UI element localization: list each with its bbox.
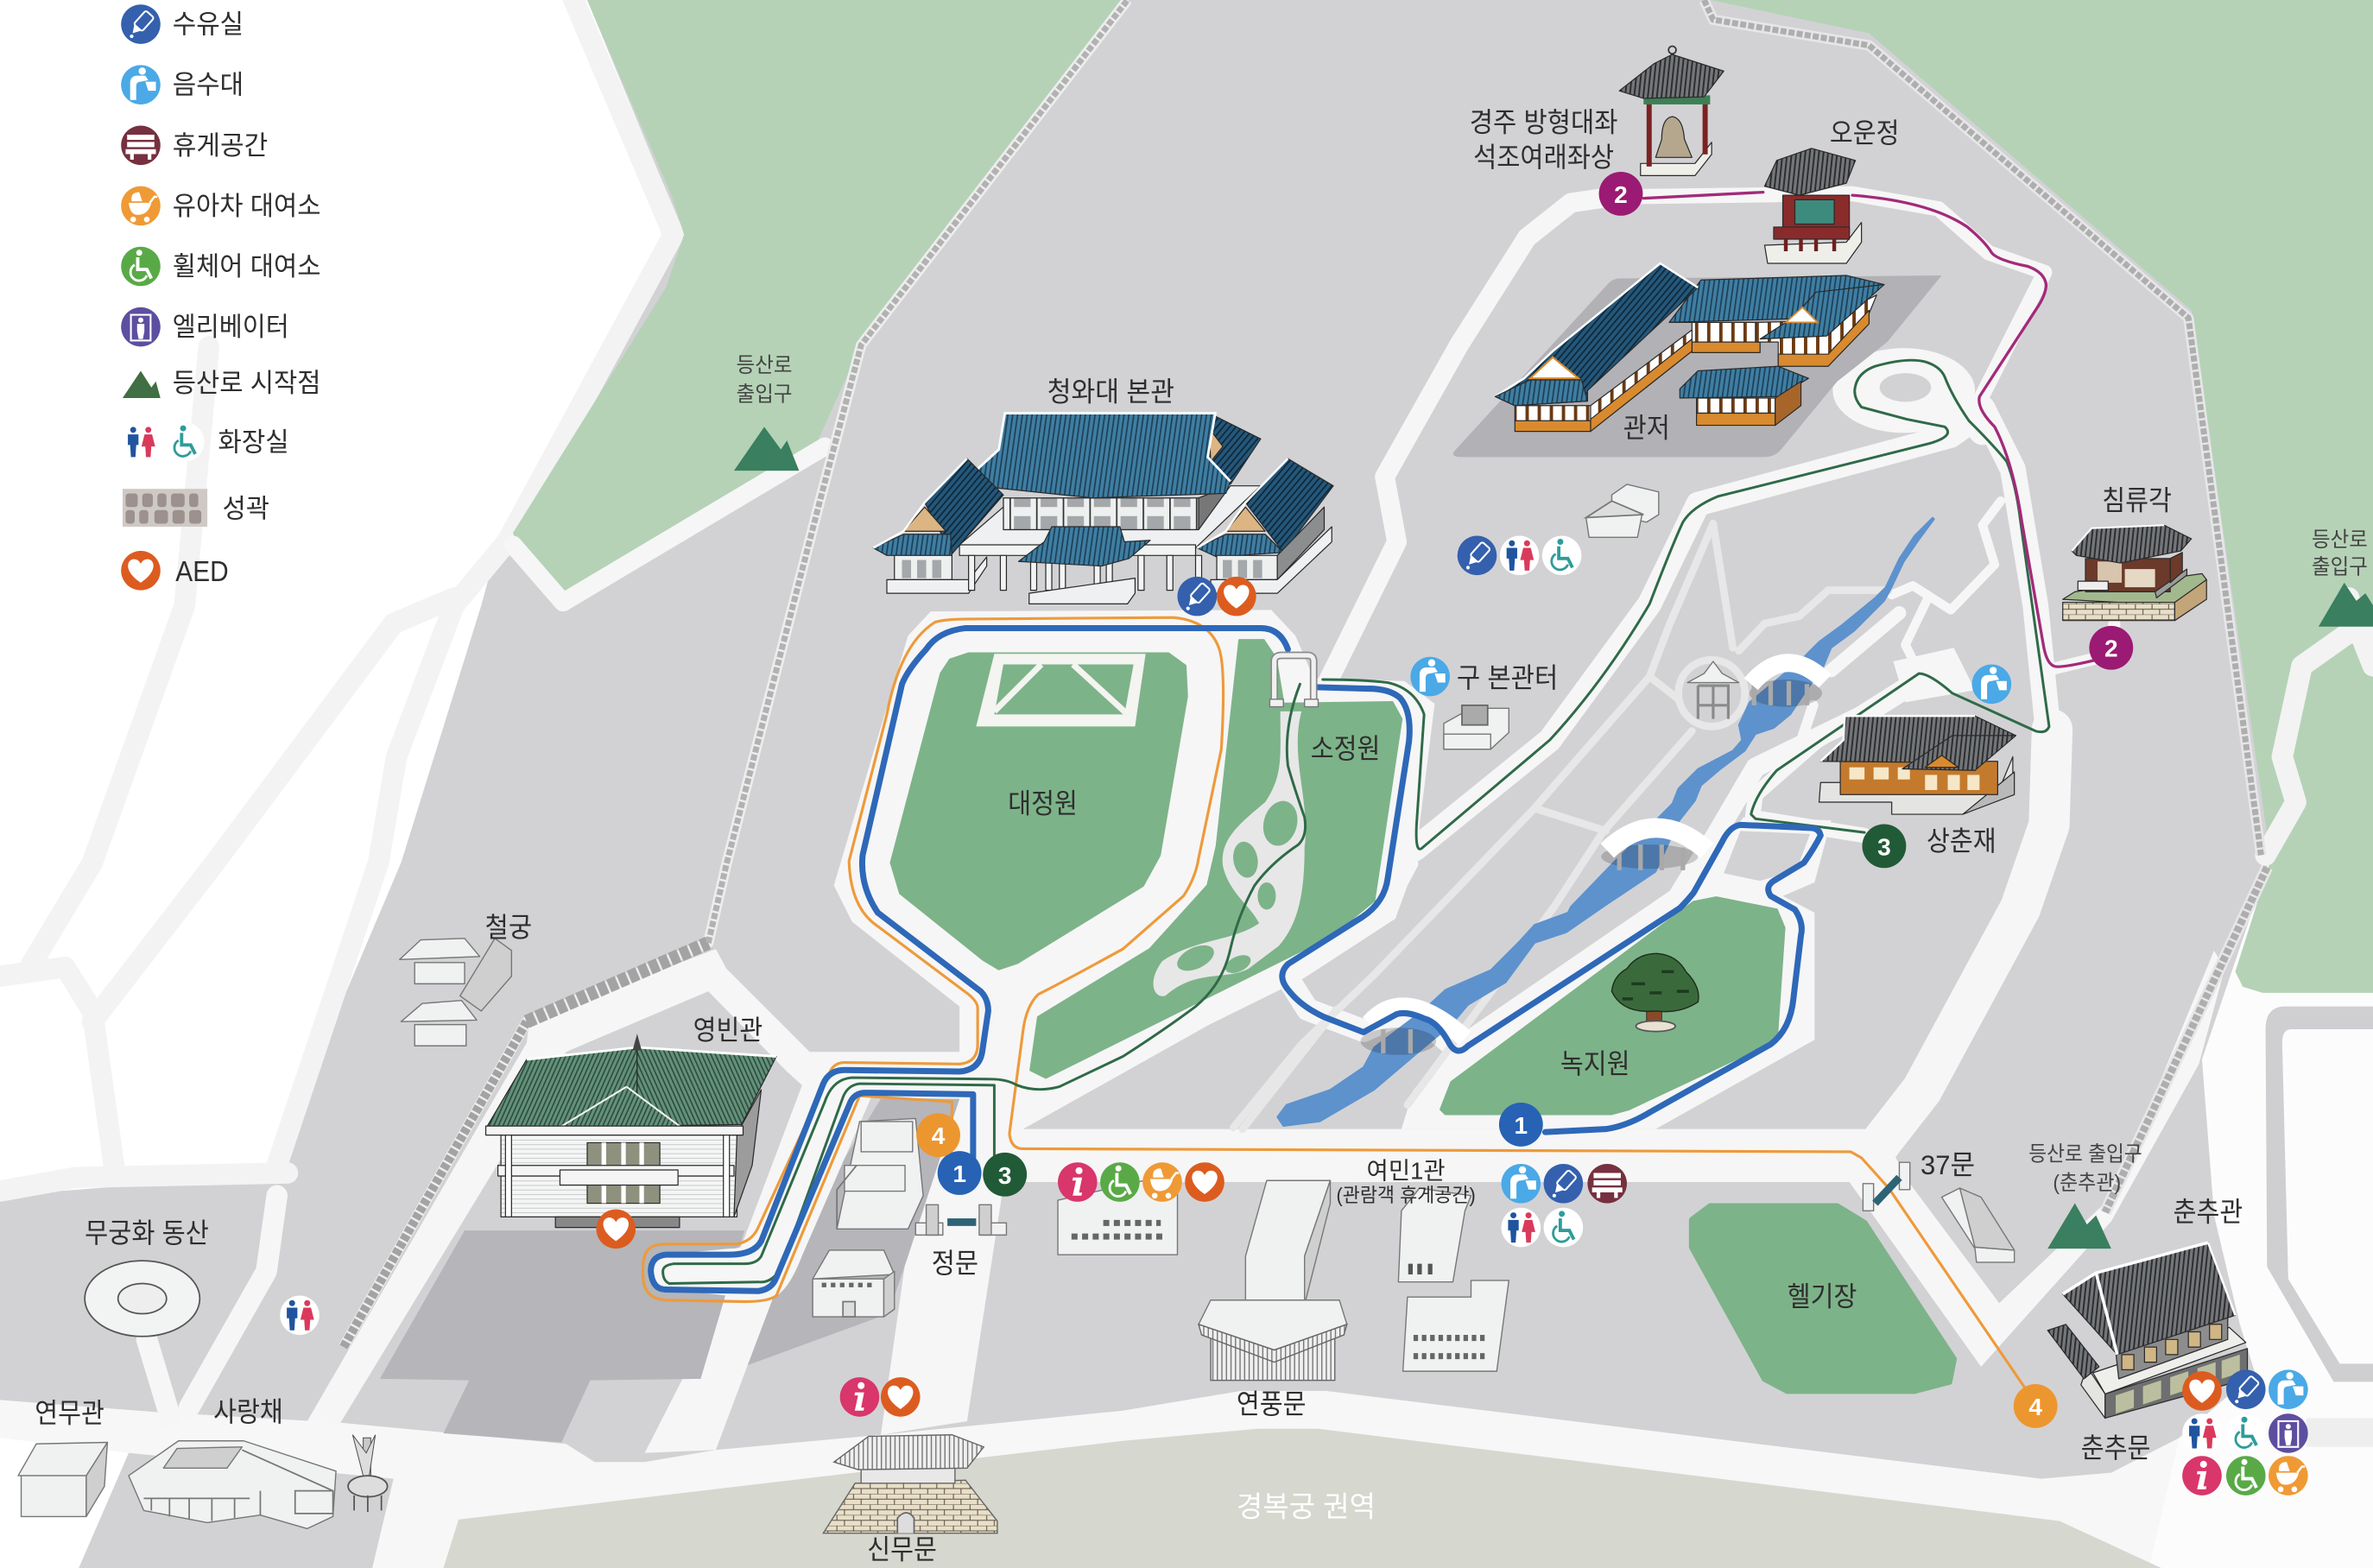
gazebo in garden — [1687, 661, 1739, 719]
map labels: 헬기장 — [1788, 1281, 1857, 1312]
building: tall block behind 연풍문 — [1245, 1180, 1330, 1305]
map labels: 정문 — [932, 1248, 978, 1279]
green: hillside north-west — [513, 0, 1128, 595]
green: 헬기장 lawn — [1692, 1206, 1954, 1391]
legend: 화장실 — [121, 422, 289, 462]
map labels: 경복궁 권역 — [1237, 1491, 1376, 1523]
building: 침류각 — [2063, 525, 2206, 621]
building: beside 37문 — [1942, 1188, 2015, 1262]
statue — [348, 1435, 388, 1512]
marker: route 2 end: 2 — [2104, 635, 2118, 662]
legend: AED: AED — [175, 556, 229, 588]
map labels: (관람객 휴게공간) — [1337, 1184, 1476, 1206]
legend: 유아차 대여소 — [121, 187, 321, 225]
building: 상춘재 — [1819, 716, 2015, 814]
legend: 휴게공간 — [121, 125, 268, 165]
building: 연무관 — [18, 1443, 107, 1516]
legend: 수유실 — [121, 4, 244, 44]
route underlay around the west loop — [666, 1078, 855, 1283]
marker: route 1 end: 1 — [1515, 1112, 1528, 1139]
marker: route 3 end — [1863, 824, 1906, 868]
tree: 녹지원 — [1611, 953, 1699, 1032]
green: hillside north-east — [1710, 0, 2373, 993]
legend: 등산로 시작점: 등산로 시작점 — [173, 369, 321, 398]
map labels: 37문 — [1921, 1149, 1975, 1180]
small grey block inside route — [1724, 831, 1810, 881]
icon: 등산로 mountain west — [734, 427, 799, 471]
gate: 37문 — [1863, 1162, 1910, 1211]
marker: route 3 start: 3 — [998, 1162, 1011, 1189]
monument: 구 본관터 — [1444, 705, 1509, 749]
building: west office 2 — [813, 1250, 895, 1317]
marker: route 1 start: 1 — [952, 1160, 966, 1187]
building: 춘추관 — [2047, 1242, 2248, 1418]
building: 청와대 본관 — [873, 414, 1333, 604]
building: west office stack — [837, 1118, 923, 1229]
map labels: 등산로 출입구 — [2028, 1141, 2142, 1166]
building: 석조여래좌상 pavilion — [1619, 46, 1724, 175]
marker: route 3 start — [983, 1153, 1027, 1197]
map labels: 오운정 — [1830, 117, 1899, 149]
map labels: 출입구 — [737, 383, 792, 407]
bridges — [1361, 663, 1826, 1055]
map labels: 신무문 — [867, 1533, 937, 1565]
route 3: dark green — [663, 360, 2049, 1283]
legend: AED — [121, 551, 229, 591]
map labels: 상춘재 — [1927, 825, 1996, 857]
building: 신무문 — [823, 1435, 997, 1533]
map labels: 무궁화 동산 — [85, 1217, 209, 1249]
building: 연풍문 — [1199, 1300, 1347, 1381]
building: 사랑채 — [129, 1441, 336, 1528]
icon: 등산로 mountain east — [2319, 583, 2373, 627]
legend: 성곽: 성곽 — [223, 494, 269, 523]
map labels: 영빈관 — [693, 1015, 763, 1046]
legend: 엘리베이터 — [121, 307, 289, 346]
green: 녹지원 lawn — [1440, 897, 1784, 1114]
route 1: blue — [651, 628, 1820, 1291]
gate arch at 소정원 — [1269, 655, 1318, 707]
route markers — [916, 172, 2133, 1428]
marker: route 4 start: 4 — [932, 1122, 946, 1149]
legend — [121, 4, 321, 591]
map labels: 소정원 — [1311, 733, 1380, 764]
marker: route 2 start — [1599, 172, 1642, 216]
building: 철궁 — [400, 939, 511, 1046]
map labels: 구 본관터 — [1457, 662, 1558, 693]
building: 오운정 pavilion — [1764, 149, 1862, 263]
map labels: 춘추관 — [2174, 1197, 2243, 1228]
map labels: 등산로 — [2312, 528, 2368, 552]
map labels: (춘추관) — [2053, 1171, 2121, 1195]
road network — [147, 193, 2373, 1453]
legend: 음수대: 음수대 — [173, 71, 244, 100]
green: 소정원 lawn and paths — [1030, 640, 1402, 1078]
city wall — [344, 0, 2267, 1347]
legend: 화장실: 화장실 — [218, 427, 289, 457]
map labels: 침류각 — [2102, 485, 2172, 516]
map labels: 연무관 — [35, 1398, 104, 1429]
marker: route 2 start: 2 — [1614, 181, 1628, 208]
icon: 등산로 mountain 춘추관 — [2047, 1204, 2111, 1249]
building: 무궁화 동산 mound — [85, 1261, 199, 1337]
map labels: 출입구 — [2312, 554, 2368, 579]
map labels: 녹지원 — [1560, 1048, 1629, 1079]
map labels: 사랑채 — [213, 1396, 283, 1427]
map labels: 관저 — [1623, 413, 1670, 444]
route 4: orange — [642, 617, 2025, 1388]
building: 관저 — [1453, 263, 1942, 457]
route 2: magenta — [1643, 193, 2096, 667]
legend: 휠체어 대여소: 휠체어 대여소 — [173, 252, 321, 281]
map labels: 등산로 — [737, 353, 792, 377]
marker: route 4 end: 4 — [2028, 1394, 2042, 1420]
legend: 수유실: 수유실 — [173, 10, 244, 40]
map labels: 경주 방형대좌 — [1470, 106, 1617, 138]
map labels: 석조여래좌상 — [1473, 142, 1614, 173]
dark paved areas — [380, 1007, 2373, 1447]
legend: 유아차 대여소: 유아차 대여소 — [173, 192, 321, 221]
marker: route 4 start — [916, 1113, 960, 1157]
road: east gate fork — [1850, 951, 2224, 1367]
marker: route 3 end: 3 — [1877, 833, 1891, 860]
legend: 휠체어 대여소 — [121, 247, 321, 286]
map labels: 대정원 — [1008, 787, 1078, 819]
legend: 휴게공간: 휴게공간 — [173, 131, 268, 161]
marker: route 4 end — [2014, 1384, 2058, 1428]
building: 영빈관 — [486, 1034, 776, 1228]
marker: route 1 end — [1499, 1103, 1543, 1147]
map labels: 춘추문 — [2081, 1432, 2150, 1464]
building: 여민2관 — [1403, 1280, 1509, 1371]
map labels: 여민1관 — [1367, 1158, 1446, 1185]
marker: route 2 end — [2089, 626, 2133, 670]
stream — [1277, 517, 1934, 1126]
building: 정문 — [915, 1204, 1006, 1235]
marker: route 1 start — [938, 1151, 982, 1195]
building: 여민1관 — [1398, 1188, 1471, 1282]
building: 안내 office — [1058, 1173, 1177, 1255]
legend: 성곽 — [123, 489, 269, 527]
facility icons on map — [280, 536, 2308, 1495]
pond ellipse in the loop road — [1880, 373, 1931, 401]
map labels: 철궁 — [485, 912, 532, 943]
map labels: 연풍문 — [1237, 1388, 1306, 1419]
legend: 엘리베이터: 엘리베이터 — [173, 313, 289, 342]
green: 대정원 lawn — [891, 654, 1186, 969]
map labels: 청와대 본관 — [1047, 376, 1174, 408]
legend: 음수대 — [121, 65, 244, 104]
building: small houses near 관저 — [1586, 484, 1659, 537]
